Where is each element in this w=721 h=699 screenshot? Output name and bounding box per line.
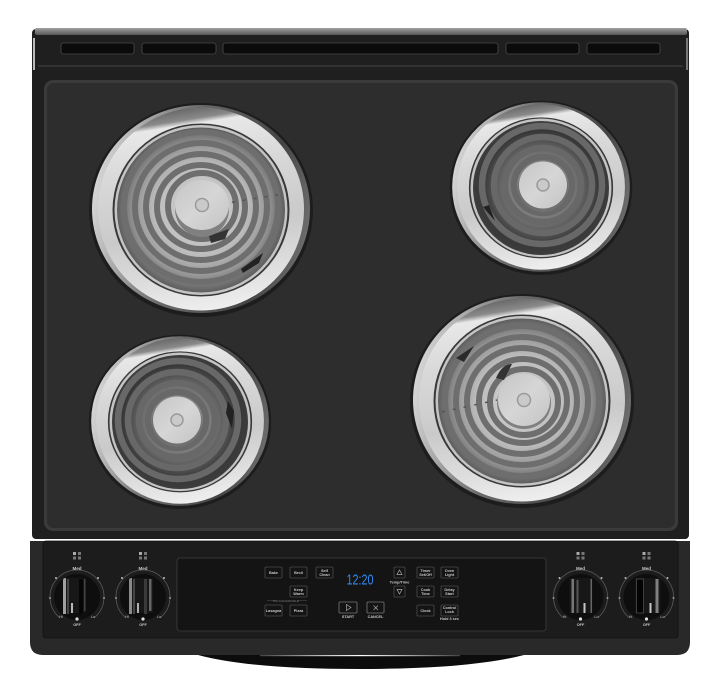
button labels: CANCEL [368,615,384,619]
button labels: Temp/Time [390,580,409,584]
button labels: Warm [293,592,304,596]
knob: right front [552,566,608,627]
oven control display panel [177,558,546,631]
back guard top edge [35,28,687,35]
button labels: Light [445,573,455,577]
button labels: Keep [294,588,304,592]
center disc [152,396,202,447]
button labels: Self [321,569,329,573]
center disc [518,162,568,212]
coil [118,361,238,479]
clock display: 12:20 [346,572,374,588]
burner: large rear left [89,103,313,317]
back guard vents [61,43,660,54]
coil [124,132,278,282]
coil [445,326,599,476]
button labels: Hold 3 sec [440,617,459,621]
button labels: Bake [269,571,278,575]
burner: small rear right [450,101,632,275]
button labels: Start [445,592,455,596]
button labels: Delay [444,588,455,592]
indicator dots [73,552,650,560]
button labels [266,569,459,621]
button labels: Lock [445,610,455,614]
button labels: Cook [421,588,431,592]
handle shadow [198,655,524,669]
programmable label [267,599,307,603]
center disc [497,374,551,429]
cooktop plate [44,80,678,531]
arrows and icons [346,570,402,610]
button labels: Pizza [294,609,304,613]
button labels: START [342,615,355,619]
burner: small front left [89,335,271,509]
button labels: Oven [445,569,455,573]
button labels: Time [421,592,430,596]
control panel [30,541,690,669]
knob: left front [115,566,171,627]
button labels: Lasagna [266,609,282,613]
button labels: Control [443,606,456,610]
button labels: Clean [319,573,330,577]
button labels: Set/Off [419,573,432,577]
center disc [175,180,229,237]
range body [32,28,689,539]
button labels: Clock [420,609,432,613]
knob: left rear [49,566,105,627]
burner: large front right [410,294,634,508]
knob: right rear [618,566,674,627]
button labels: Broil [294,571,303,575]
programmable label: PROGRAMMABLE [273,599,299,603]
touch buttons [265,567,458,616]
coil [482,126,602,244]
button labels: Timer [420,569,431,573]
